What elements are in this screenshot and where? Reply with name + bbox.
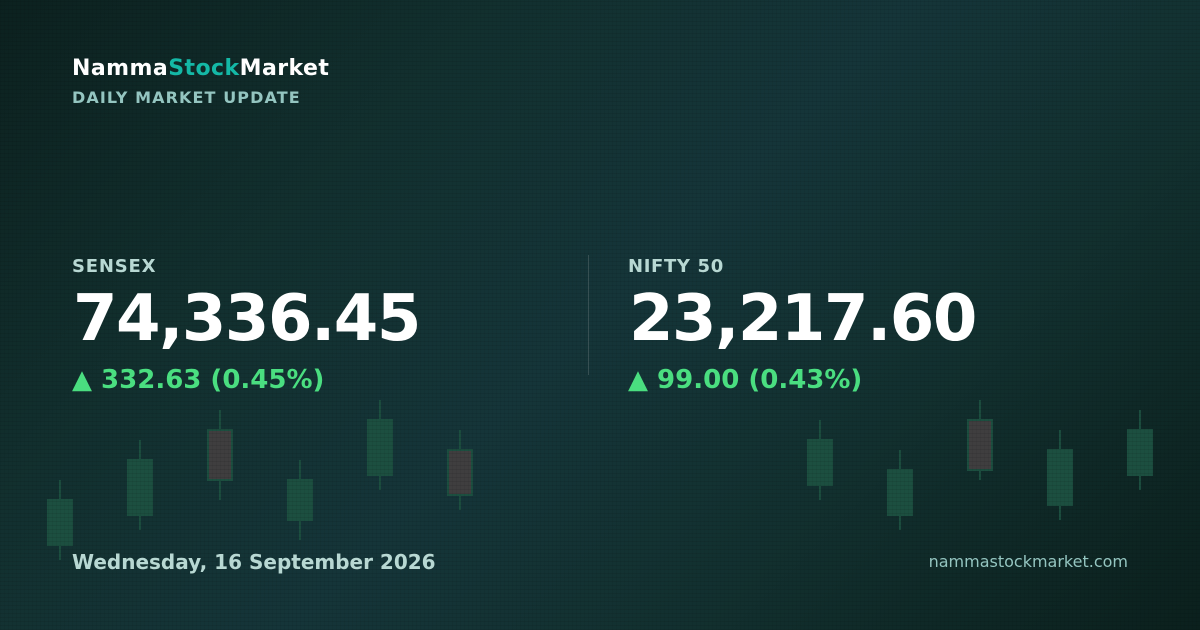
candle 7 (808, 420, 832, 500)
sensex change: ▲ 332.63 (0.45%) (72, 365, 324, 395)
candle 3 (208, 410, 232, 500)
panel: sensex (72, 256, 420, 395)
panel: nifty (628, 256, 976, 395)
nifty value: 23,217.60 (629, 282, 976, 356)
candle 4 (288, 460, 312, 540)
divider (588, 255, 589, 375)
candle 5 (368, 400, 392, 490)
date: Wednesday, 16 September 2026 (72, 550, 436, 574)
website: nammastockmarket.com (929, 552, 1128, 571)
sensex value: 74,336.45 (73, 282, 420, 356)
candle 6 (448, 430, 472, 510)
candle 9 (968, 400, 992, 480)
candle 11 (1128, 410, 1152, 490)
candle 2 (128, 440, 152, 530)
brand logo: NammaStockMarket (72, 56, 329, 81)
nifty label: NIFTY 50 (628, 256, 724, 277)
candle 1 (48, 480, 72, 560)
subtitle: DAILY MARKET UPDATE (72, 88, 301, 107)
sensex label: SENSEX (72, 256, 156, 277)
candle 8 (888, 450, 912, 530)
nifty change: ▲ 99.00 (0.43%) (628, 365, 862, 395)
candle 10 (1048, 430, 1072, 520)
